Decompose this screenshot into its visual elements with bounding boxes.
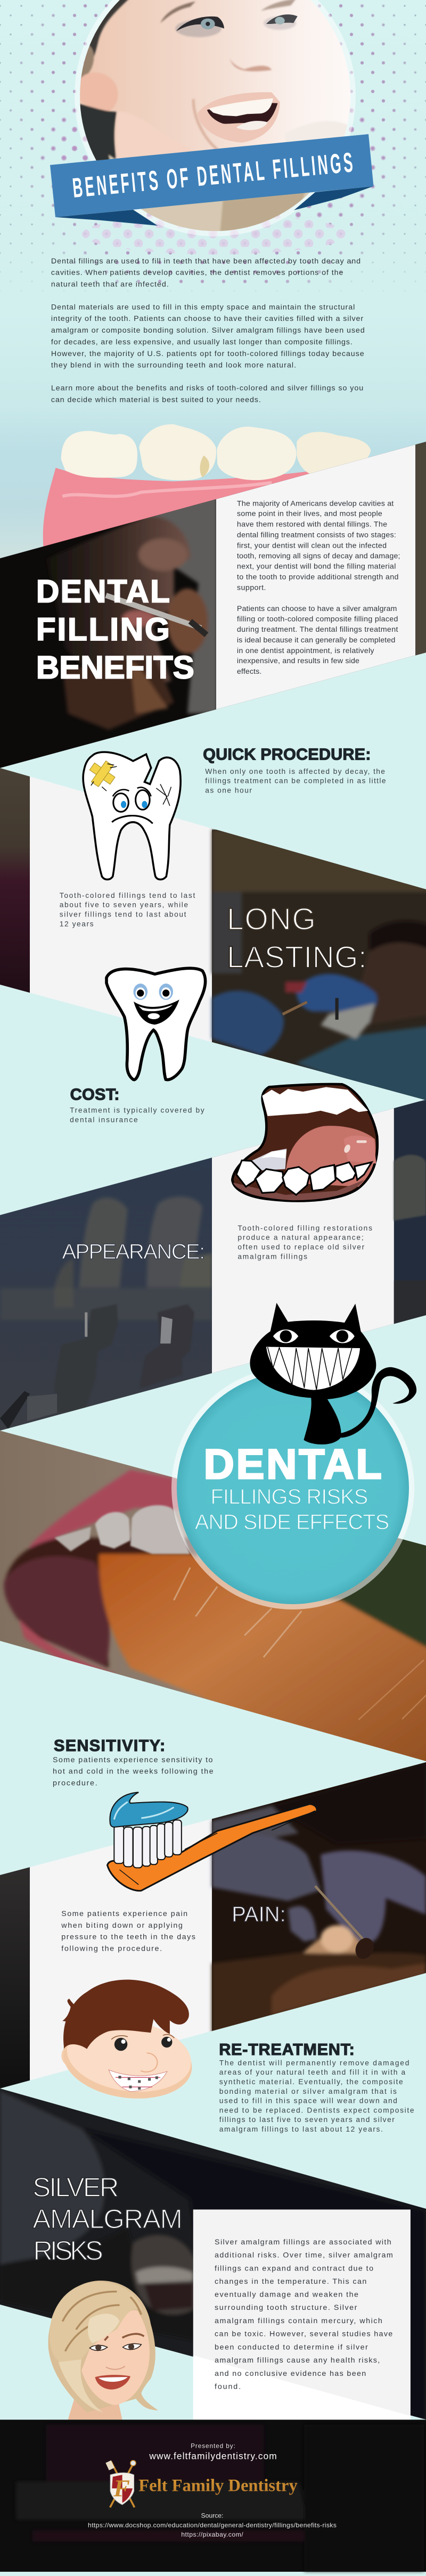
sensitivity description: Some patients experience sensitivity to [53,1756,213,1764]
heading: dental filling benefits: BENEFITS [36,649,194,685]
badge fill [177,1372,409,1604]
intro text block: Dental fillings are used to fill in teeth that have been affected by tooth decay and [51,257,361,266]
right strip photo [415,436,426,660]
badge heading: FILLINGS RISKS [210,1485,368,1508]
card text: eventually damage and weaken the [215,2291,358,2299]
intro text block: for decades, are less expensive, and usually last longer than composite fillings. [51,338,353,346]
band background [0,436,426,777]
footer background [0,2420,426,2572]
text block: benefits description: in one dentist appointment, is relatively [237,647,374,655]
title ribbon [50,134,374,226]
icon: open mouth [232,1084,378,1201]
cost description: Treatment is typically covered by [70,1106,204,1114]
re-treatment description: need to be replaced. Dentists expect composite [219,2107,414,2115]
left strip photo [0,1867,30,2088]
block: re-treatment [219,2041,414,2133]
icon: boy with braces [59,1980,197,2107]
text block: benefits description: first, your dentist will clean out the infected [237,541,387,550]
card text: and no conclusive evidence has been [215,2369,366,2378]
badge ring [171,1367,414,1609]
heading: pain: PAIN: [232,1903,286,1926]
text block: benefits description: support. [237,583,266,592]
text block: long lasting description: Tooth-colored fillings tend to last [60,891,195,899]
footer dim photo [17,2425,424,2571]
intro text block: integrity of the tooth. Patients can choose to have their cavities filled with a silver [51,315,363,323]
white text panel [216,436,415,719]
card text: been conducted to determine if silver [215,2343,368,2352]
heading: cost: COST: [70,1085,119,1103]
text block: long lasting description: 12 years [60,920,94,928]
intro text block: amalgram or composite bonding solution. Silver amalgram fillings have been used [51,326,365,335]
risks badge [171,1367,414,1609]
ribbon right fold [294,186,373,210]
text block: benefits description: tooth, removing all signs of decay and damage; [237,552,400,560]
heading: dental filling benefits: DENTAL [36,573,170,609]
badge heading: DENTAL [204,1440,382,1488]
intro text block: Dental materials are used to fill in this empty space and maintain the structural [51,303,355,312]
text block: pain description: Some patients experience pain [61,1910,187,1918]
heading: quick procedure: QUICK PROCEDURE: [203,745,371,763]
intro text block: natural teeth that are infected. [51,280,169,288]
presented by: Presented by: [191,2442,235,2449]
card background [193,2209,411,2420]
intro text block: they blend in with the surrounding teeth and look more natural. [51,361,296,369]
heading: appearance: APPEARANCE: [62,1240,205,1264]
text block: long lasting description [60,891,195,928]
card text: Silver amalgram fillings are associated with [215,2238,391,2247]
band text: long lasting heading: LONG [227,903,316,937]
quick procedure description: When only one tooth is affected by decay, the [205,767,385,775]
heading: dental filling benefits: FILLING [36,612,170,647]
re-treatment description: bonding material or silver amalgram that is [219,2087,397,2095]
panel: footer [0,2420,426,2572]
icon: sad cracked tooth [83,752,181,879]
text block: benefits description: some point in their lives, and most people [237,510,382,518]
band text: long lasting heading [227,903,367,975]
right photo strip [394,1101,426,1351]
dental model photo: teeth and gum [43,424,372,548]
text block: benefits description: dental filling treatment consists of two stages: [237,531,396,539]
panel: silver amalgam risks band [0,2083,426,2425]
text block: benefits description: during treatment. The dental fillings treatment [237,625,398,634]
card text: can be toxic. However, several studies have [215,2330,392,2339]
hero circle ring [75,0,356,236]
panel: appearance band [0,1096,426,1437]
photo band: mouth biting carrot [0,1424,426,1782]
sources [88,2512,337,2538]
intro text block: Learn more about the benefits and risks of tooth-colored and silver fillings so you [51,384,363,393]
re-treatment description: The dentist will permanently remove damaged [219,2059,409,2067]
text block: benefits description: inexpensive, and results in few side [237,657,359,665]
ribbon left fold [55,210,158,226]
heading: sensitivity: SENSITIVITY: [54,1737,165,1755]
block: sensitivity [53,1737,214,1787]
white panel [30,1819,212,2080]
icon: happy tooth [106,968,206,1080]
card text: fillings can expand and contract due to [215,2265,373,2273]
re-treatment description: areas of your natural teeth and fill it in with a [219,2068,406,2076]
heading: silver amalgam risks: RISKS [33,2235,103,2266]
presented by: www.feltfamilydentistry.com [149,2450,277,2461]
logo shield [105,2461,136,2507]
sensitivity description [53,1756,214,1787]
intro text block: cavities. When patients develop cavities, the dentist removes portions of the [51,268,343,277]
intro text block: can decide which material is best suited to your needs. [51,396,261,404]
block: cost [70,1085,204,1124]
panel: long lasting band [0,764,426,1107]
block: quick procedure [203,745,386,795]
card text: surrounding tooth structure. Silver [215,2303,357,2312]
sensitivity description: hot and cold in the weeks following the [53,1767,214,1776]
title text: BENEFITS OF DENTAL FILLINGS [71,147,354,203]
text block: benefits description: Patients can choose to have a silver amalgram [237,605,397,613]
re-treatment description: synthetic material. Eventually, the composite [219,2078,403,2086]
panel: dental filling benefits band [0,436,426,777]
photo: dentist treating patient [212,830,426,1107]
halftone dot pattern [0,0,426,303]
photo: dark mouth close-up [0,2083,426,2425]
heading: re-treatment: RE-TREATMENT: [219,2041,355,2059]
ribbon body [50,134,374,217]
text block: pain description: following the procedure. [61,1945,162,1953]
card lower highlight [193,2355,411,2420]
intro text block: However, the majority of U.S. patients opt for tooth-colored fillings today because [51,350,364,358]
re-treatment description: fillings to last five to seven years and silver [219,2116,395,2124]
heading: dental filling benefits [36,573,194,685]
card text: found. [215,2383,241,2391]
photo: shade guide tabs [0,1096,426,1437]
header section background [0,0,426,564]
white panel [30,766,212,1048]
card text: additional risks. Over time, silver amalgram [215,2251,393,2260]
quick procedure description: fillings treatment can be completed in as little [205,777,386,785]
text block: long lasting description: about five to seven years, while [60,901,188,909]
re-treatment description: used to fill in this space will wear down and [219,2097,397,2105]
heading: silver amalgam risks [32,2172,183,2266]
white panel [212,1096,394,1378]
logo wordmark: Felt Family Dentistry [138,2476,298,2496]
photo: dentist tool at patient's mouth [46,485,217,730]
badge heading: AND SIDE EFFECTS [195,1510,389,1534]
text block: benefits description: filling or tooth-colored composite filling placed [237,615,398,624]
card text: changes in the temperature. This can [215,2277,366,2286]
text block: benefits description: next, your dentist will bond the filling material [237,563,396,571]
card text: amalgram fillings contain mercury, which [215,2317,382,2325]
card text [215,2238,393,2391]
text block: pain description: when biting down or applying [61,1921,183,1930]
sensitivity description: procedure. [53,1779,97,1787]
logo shield: F [113,2475,130,2502]
text block: pain description: pressure to the teeth in the days [61,1933,195,1942]
text block: benefits description: have them restored with dental fillings. The [237,521,387,529]
text block: benefits description: The majority of Americans develop cavities at [237,499,394,508]
badge heading [195,1440,389,1534]
text block: benefits description [237,499,400,676]
text block: benefits description: effects. [237,667,261,676]
icon: toothbrush with paste [108,1793,317,1891]
text block: pain description [61,1910,195,1953]
text block: appearance description: amalgram fillings [237,1252,307,1260]
re-treatment description: amalgram fillings to last about 12 years. [219,2125,383,2133]
text block: appearance description [237,1224,372,1260]
photo: gloved hands with dental mirror [212,1752,426,2037]
left strip photo [0,764,30,998]
heading: silver amalgam risks: SILVER [32,2172,119,2202]
text block: appearance description: often used to replace old silver [237,1243,365,1251]
panel: silver amalgam risks text card [193,2209,411,2420]
text block: benefits description: to the tooth to provide additional strength and [237,573,399,582]
quick procedure description: as one hour [205,787,252,795]
re-treatment description [219,2059,414,2133]
hero photo: smiling woman [76,0,356,244]
intro text block [51,257,365,404]
sources: Source: [201,2512,223,2520]
heading: silver amalgam risks: AMALGRAM [32,2204,183,2234]
icon: blonde woman [48,2281,158,2420]
text block: long lasting description: silver fillings tend to last about [60,911,186,919]
band text: long lasting heading: LASTING: [227,940,367,975]
presented by [149,2442,277,2461]
text block: benefits description: is ideal because it can generally be completed [237,636,395,645]
sources: https://pixabay.com/ [181,2531,243,2538]
quick procedure description [205,767,386,795]
card text: amalgram fillings cause any health risks, [215,2356,380,2365]
text block: appearance description: Tooth-colored filling restorations [237,1224,372,1232]
icon: grinning black cat [250,1303,416,1444]
cost description [70,1106,204,1124]
cost description: dental insurance [70,1116,138,1124]
text block: appearance description: produce a natural appearance; [237,1234,364,1242]
sources: https://www.docshop.com/education/dental/general-dentistry/fillings/benefits-risks [88,2521,337,2529]
panel: pain band [0,1752,426,2092]
